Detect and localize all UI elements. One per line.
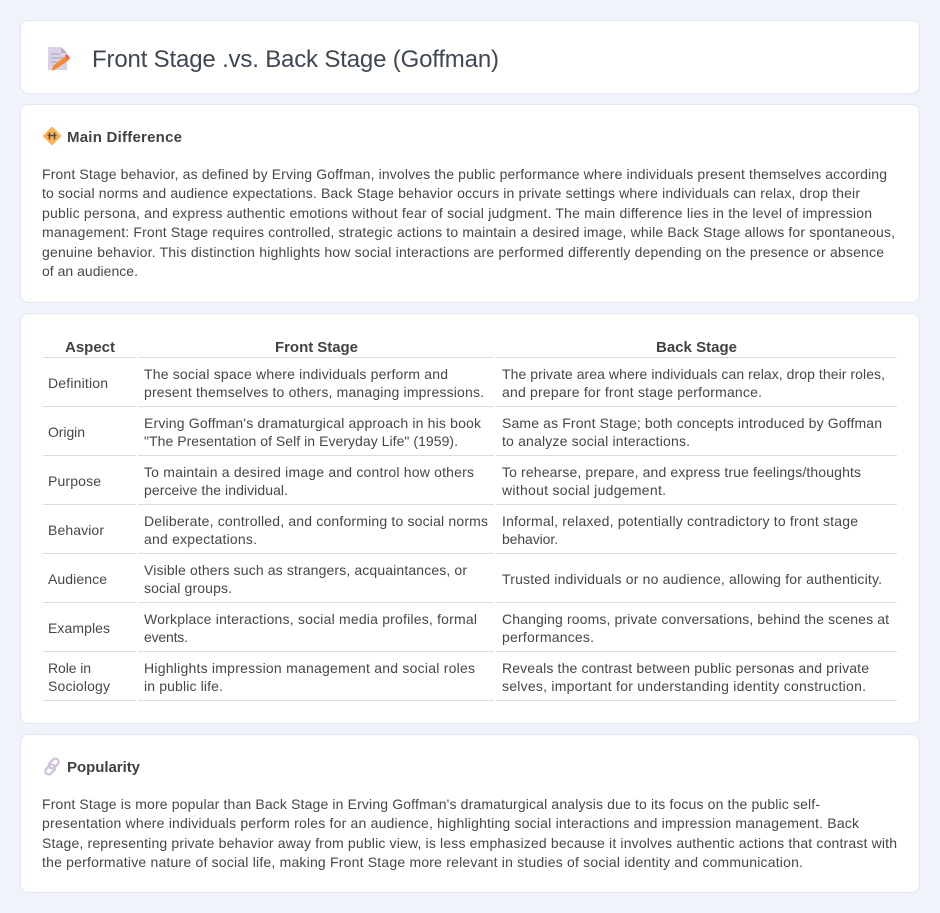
row: origin: [43, 415, 897, 456]
text block: popularity paragraph: the performative nature of social life, making Front Stage more relevant in studies of social identity and communication.: [42, 854, 803, 870]
row: role in sociology: Reveals the contrast between public personas and private: [502, 660, 869, 676]
row: purpose: without social judgement.: [501, 482, 666, 498]
row: examples: Workplace interactions, social media profiles, formal: [144, 611, 477, 627]
row: origin: Erving Goffman's dramaturgical approach in his book: [144, 415, 482, 431]
row: audience: Audience: [48, 571, 107, 587]
heading: main difference: Main Difference: [67, 129, 182, 146]
panel: popularity: [20, 734, 920, 892]
row: purpose: To maintain a desired image and control how others: [144, 464, 474, 480]
row: origin: Same as Front Stage; both concepts introduced by Goffman: [502, 415, 882, 431]
row: purpose: Purpose: [48, 473, 101, 489]
table header row: [43, 339, 897, 358]
row: definition: [43, 366, 897, 407]
row: audience: Visible others such as strangers, acquaintances, or: [144, 562, 467, 578]
row: behavior: Deliberate, controlled, and conforming to social norms: [144, 513, 488, 529]
text block: popularity paragraph: presentation where individuals perform roles for an audience, highlighting social interactions and impression management. Back: [42, 815, 860, 831]
row: purpose: To rehearse, prepare, and express true feelings/thoughts: [502, 464, 861, 480]
row: definition: The social space where individuals perform and: [144, 366, 448, 382]
icon: orange diamond sign: [44, 128, 60, 144]
row: origin: Origin: [48, 424, 85, 440]
row: definition: The private area where individuals can relax, drop their roles,: [502, 366, 885, 382]
table: aspect, front stage, back stage: [43, 339, 897, 701]
panel: comparison table: [20, 314, 920, 724]
row: origin: to analyze social interactions.: [502, 433, 690, 449]
text block: popularity paragraph: Front Stage is more popular than Back Stage in Erving Goffman's dramaturgical analysis due to its focus on the public self-: [42, 796, 820, 812]
text block: popularity paragraph: [42, 796, 897, 870]
row: definition: and prepare for front stage performance.: [502, 384, 762, 400]
row: audience: Trusted individuals or no audience, allowing for authenticity.: [502, 571, 882, 587]
row: behavior: [43, 513, 897, 554]
row: origin: "The Presentation of Self in Everyday Life" (1959).: [144, 433, 458, 449]
row: definition: present themselves to others, managing impressions.: [144, 384, 484, 400]
row: behavior: Informal, relaxed, potentially contradictory to front stage: [502, 513, 858, 529]
panel: main difference: [20, 104, 920, 302]
row: audience: social groups.: [144, 580, 232, 596]
text block: main difference paragraph: [42, 166, 895, 279]
row: behavior: Behavior: [48, 522, 104, 538]
row: role in sociology: selves, important for understanding identity construction.: [502, 678, 866, 694]
text block: main difference paragraph: management: Front Stage requires controlled, strategic actions to maintain a desired image, while Back Stage allows for spontaneous,: [42, 224, 895, 240]
row: examples: Examples: [48, 620, 110, 636]
text block: main difference paragraph: public persona, and express authentic emotions without fear of social judgment. The main difference lies in the level of impression: [42, 205, 872, 221]
row: examples: [43, 611, 897, 652]
row: definition: Definition: [48, 375, 108, 391]
row: role in sociology: in public life.: [144, 678, 223, 694]
row: examples: events.: [144, 629, 188, 645]
row: behavior: behavior.: [502, 531, 558, 547]
table header row: Front Stage: [275, 339, 358, 356]
row: purpose: [43, 464, 897, 505]
text block: main difference paragraph: to social norms and audience expectations. Back Stage behavior occurs in private settings where individuals can relax, drop their: [42, 185, 860, 201]
text block: popularity paragraph: Stage, representing private behavior away from public view, is less emphasized because it involves authentic actions that contrast with: [42, 835, 897, 851]
icon: document with pencil: [48, 47, 70, 71]
text block: main difference paragraph: Front Stage behavior, as defined by Erving Goffman, involves the public performance where individuals present themselves according: [42, 166, 887, 182]
table header row: Back Stage: [656, 339, 737, 356]
panel: title card: [20, 20, 920, 94]
row: role in sociology: [43, 660, 897, 701]
row: examples: Changing rooms, private conversations, behind the scenes at: [502, 611, 889, 627]
row: examples: performances.: [502, 629, 594, 645]
row: role in sociology: Role in: [48, 660, 91, 676]
row: audience: [43, 562, 897, 603]
row: purpose: perceive the individual.: [144, 482, 288, 498]
icon: chain link: [44, 757, 60, 776]
heading: popularity: Popularity: [67, 759, 141, 776]
table header row: Aspect: [65, 339, 115, 356]
row: role in sociology: Highlights impression management and social roles: [144, 660, 475, 676]
row: role in sociology: Sociology: [48, 678, 110, 694]
title: Front Stage .vs. Back Stage (Goffman): [92, 46, 499, 73]
text block: main difference paragraph: of an audience.: [42, 263, 138, 279]
row: behavior: and expectations.: [144, 531, 257, 547]
text block: main difference paragraph: genuine behavior. This distinction highlights how social interactions are performed differently depending on the presence or absence: [42, 244, 884, 260]
